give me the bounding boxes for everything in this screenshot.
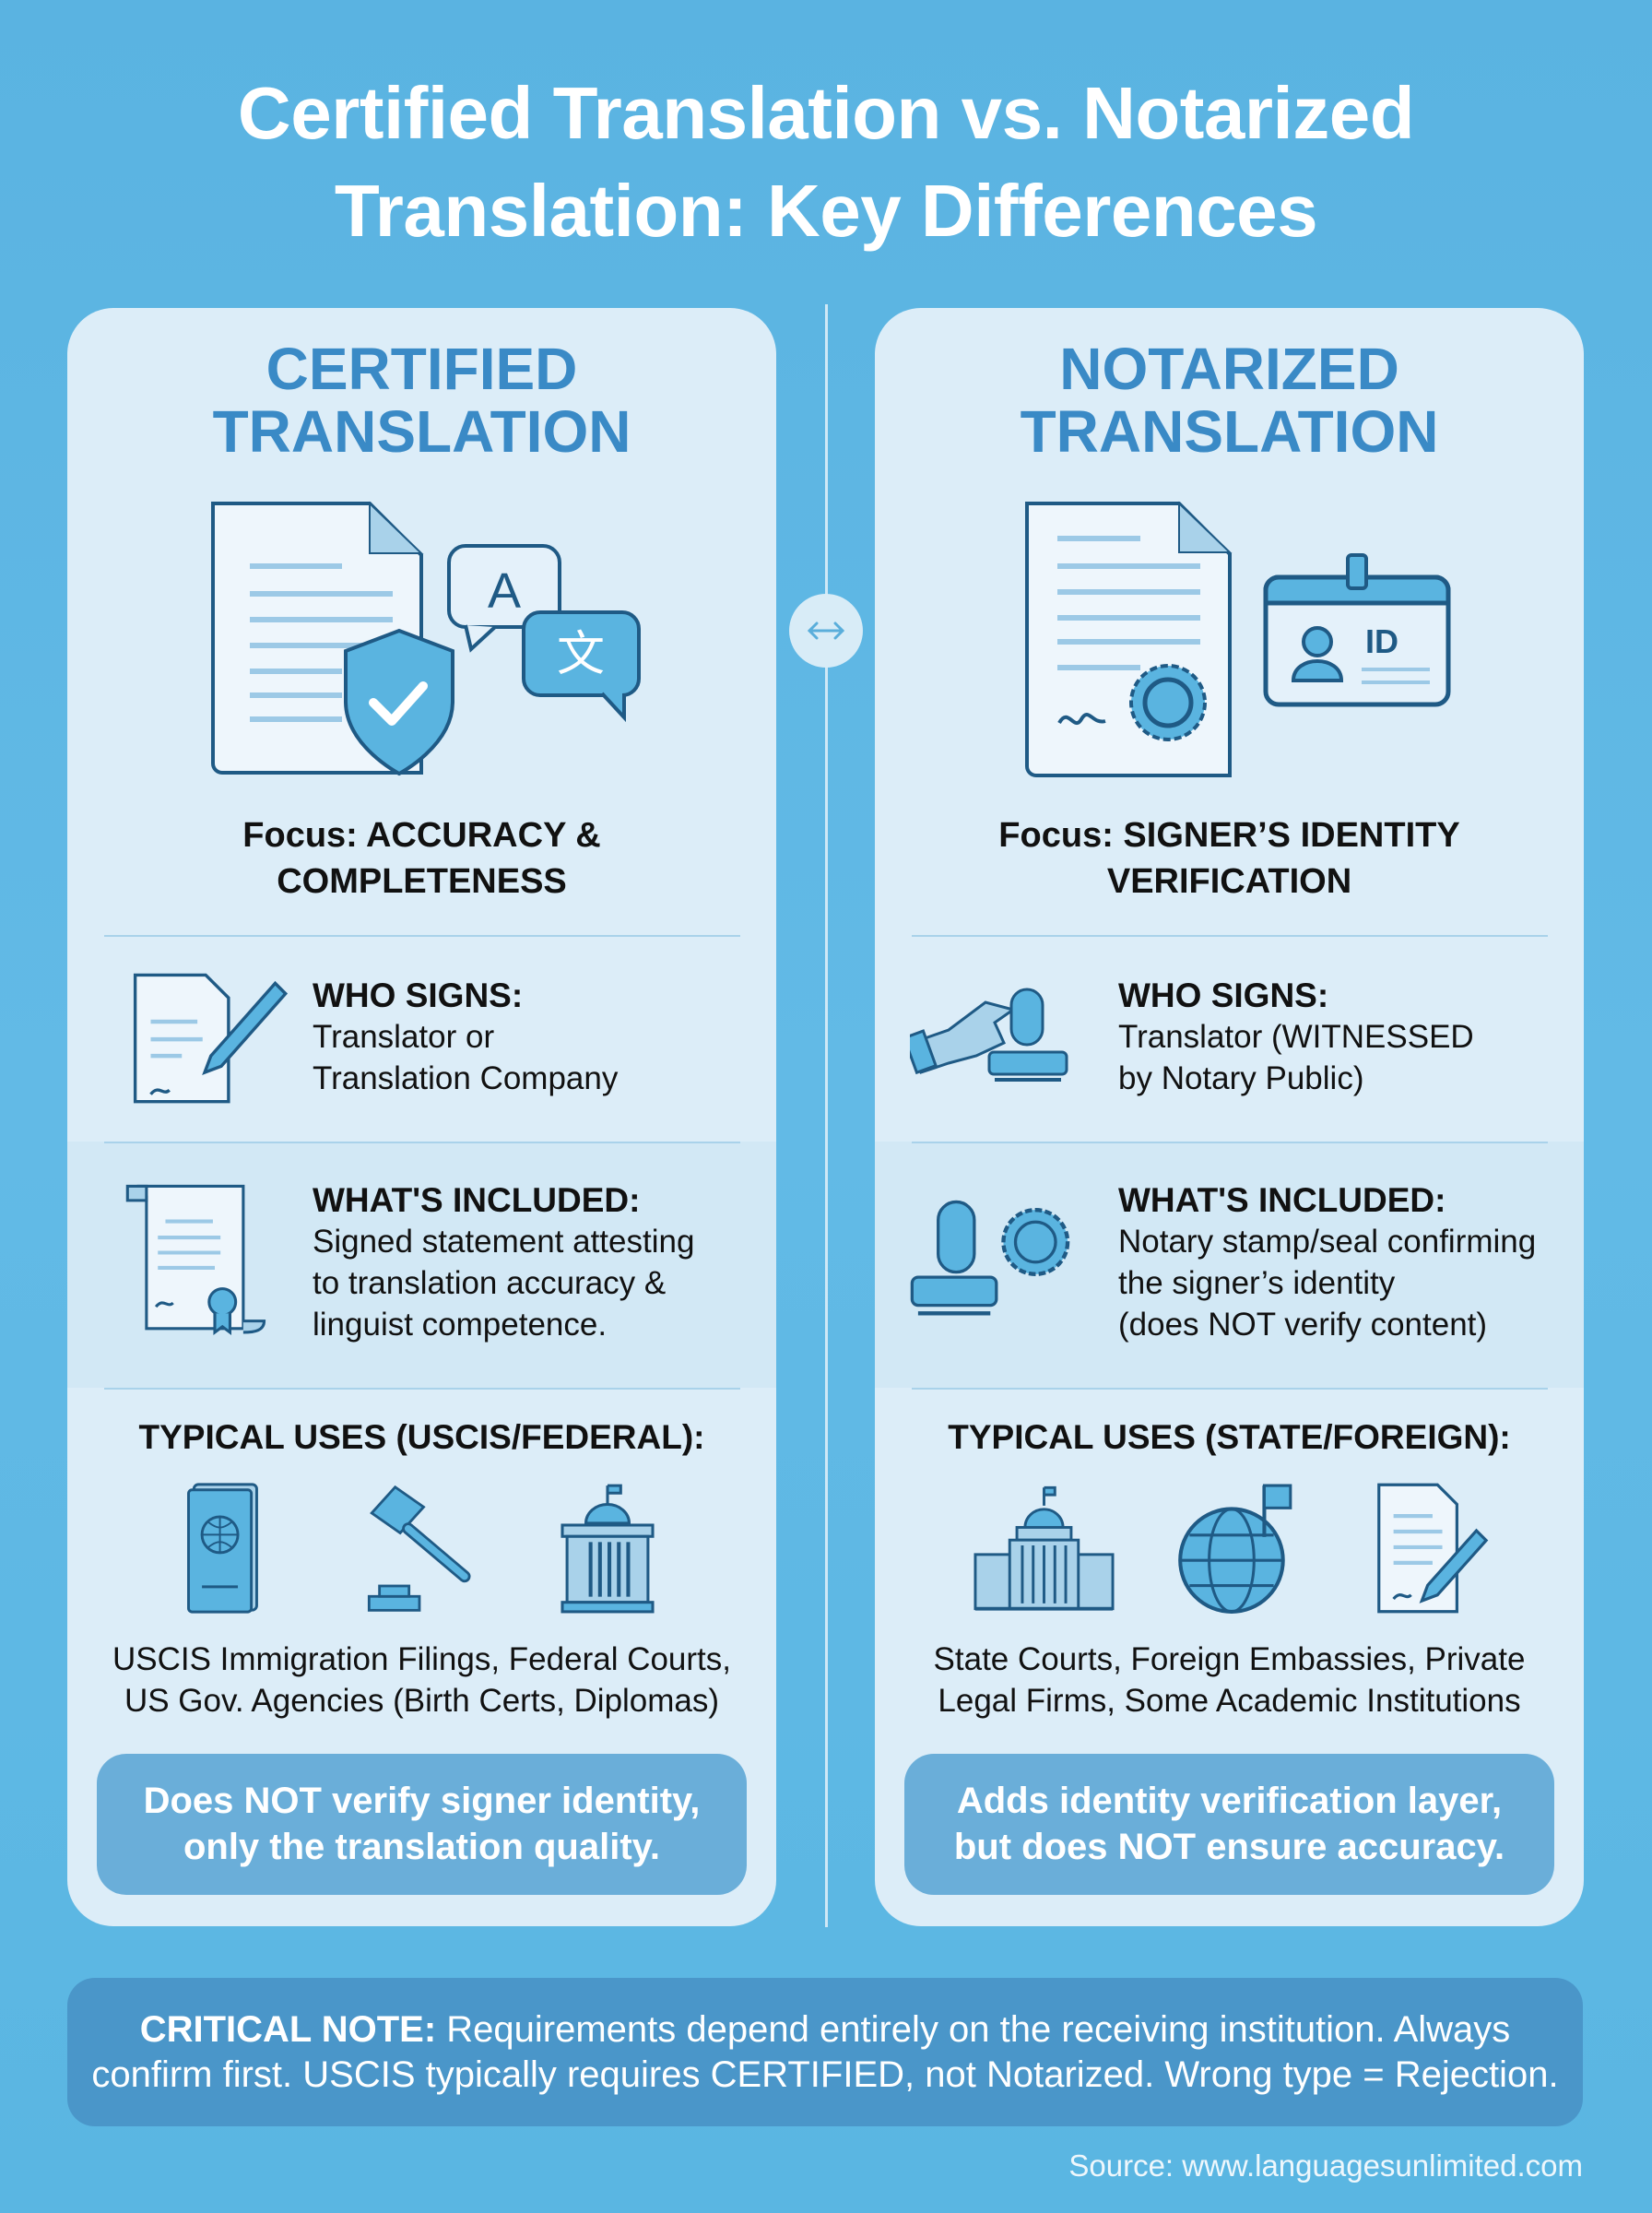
- focus text: COMPLETENESS: [277, 862, 567, 901]
- focus text: VERIFICATION: [1107, 862, 1351, 901]
- section: who signs: [910, 976, 1474, 1096]
- text: what's included: the signer’s identity: [1118, 1265, 1395, 1301]
- text: typical uses: State Courts, Foreign Embassies, Private: [934, 1641, 1525, 1677]
- title: Certified Translation vs. Notarized: [238, 72, 1414, 154]
- text: what's included: WHAT'S INCLUDED:: [313, 1181, 640, 1219]
- callout: notarized limitation: but does NOT ensure accuracy.: [954, 1827, 1504, 1867]
- heading: certified: CERTIFIED: [266, 336, 577, 402]
- text: who signs: Translation Company: [313, 1060, 618, 1096]
- icon: globe with flag: [1178, 1485, 1292, 1614]
- icon: double arrow: [789, 594, 863, 668]
- focus text: Focus: SIGNER’S IDENTITY: [998, 816, 1460, 855]
- heading: notarized: NOTARIZED: [1059, 336, 1399, 402]
- text: who signs: WHO SIGNS:: [313, 976, 523, 1014]
- callout: notarized limitation: Adds identity verification layer,: [957, 1781, 1502, 1821]
- icon: government building: [560, 1485, 655, 1614]
- text: who signs: [1118, 976, 1474, 1096]
- callout: certified limitation: only the translation quality.: [183, 1827, 660, 1867]
- text: what's included: (does NOT verify content): [1118, 1307, 1487, 1343]
- critical note box: confirm first. USCIS typically requires CERTIFIED, not Notarized. Wrong type = Rejection.: [91, 2054, 1559, 2095]
- callout: notarized limitation: [904, 1754, 1554, 1895]
- text: what's included: [313, 1181, 694, 1343]
- text: typical uses: Legal Firms, Some Academic Institutions: [938, 1683, 1521, 1719]
- text: typical uses: US Gov. Agencies (Birth Certs, Diplomas): [124, 1683, 719, 1719]
- text: what's included: to translation accuracy &: [313, 1265, 666, 1301]
- text: typical uses: [112, 1641, 731, 1719]
- heading: notarized: TRANSLATION: [1021, 398, 1438, 465]
- text: what's included: Signed statement attesting: [313, 1224, 694, 1260]
- panel: notarized translation: [875, 308, 1584, 1926]
- heading: typical uses: TYPICAL USES (STATE/FOREIGN):: [948, 1418, 1511, 1456]
- icon: document with shield and speech bubbles: A: [488, 563, 521, 619]
- text: who signs: WHO SIGNS:: [1118, 976, 1328, 1014]
- icon: document with shield and speech bubbles: [211, 502, 641, 776]
- critical note box: [67, 1978, 1583, 2126]
- text: who signs: Translator or: [313, 1019, 494, 1055]
- text: who signs: by Notary Public): [1118, 1060, 1363, 1096]
- critical note box: CRITICAL NOTE: Requirements depend entirely on the receiving institution. Always: [140, 2009, 1510, 2050]
- text: what's included: Notary stamp/seal confirming: [1118, 1224, 1536, 1260]
- center divider: [825, 304, 828, 1927]
- focus text: [242, 816, 601, 901]
- text: who signs: Translator (WITNESSED: [1118, 1019, 1474, 1055]
- text: typical uses: USCIS Immigration Filings, Federal Courts,: [112, 1641, 731, 1677]
- icon: certificate scroll: [125, 1184, 266, 1335]
- icon: document with seal and ID card: [1025, 502, 1451, 777]
- icon: gavel: [367, 1485, 471, 1612]
- icon: document with seal and ID card: ID: [1365, 622, 1398, 660]
- source: Source: www.languagesunlimited.com: [1068, 2148, 1583, 2183]
- heading: certified: [213, 336, 631, 465]
- text: what's included: WHAT'S INCLUDED:: [1118, 1181, 1446, 1219]
- heading: notarized: [1021, 336, 1438, 465]
- icon: document with pen: [1377, 1483, 1488, 1614]
- icon: hand and stamp: [910, 988, 1068, 1082]
- section: what's included: [67, 1142, 776, 1388]
- icon: capitol: [974, 1486, 1114, 1611]
- section: what's included: [875, 1142, 1584, 1388]
- heading: certified: TRANSLATION: [213, 398, 631, 465]
- text: who signs: [313, 976, 618, 1096]
- panel: certified translation: [67, 308, 776, 1926]
- text: typical uses: [934, 1641, 1525, 1719]
- focus text: Focus: ACCURACY &: [242, 816, 601, 855]
- icon: document with shield and speech bubbles: 文: [557, 615, 605, 684]
- text: what's included: [1118, 1181, 1536, 1343]
- focus text: [998, 816, 1460, 901]
- section: who signs: [133, 974, 618, 1103]
- title: [238, 72, 1414, 252]
- icon: signed document with pen: [133, 974, 288, 1103]
- title: Translation: Key Differences: [335, 170, 1317, 252]
- icon: stamp and seal: [911, 1201, 1069, 1315]
- callout: certified limitation: [97, 1754, 747, 1895]
- callout: certified limitation: Does NOT verify signer identity,: [144, 1781, 700, 1821]
- heading: typical uses: TYPICAL USES (USCIS/FEDERAL):: [139, 1418, 704, 1456]
- text: what's included: linguist competence.: [313, 1307, 607, 1343]
- icon: passport: [187, 1483, 258, 1614]
